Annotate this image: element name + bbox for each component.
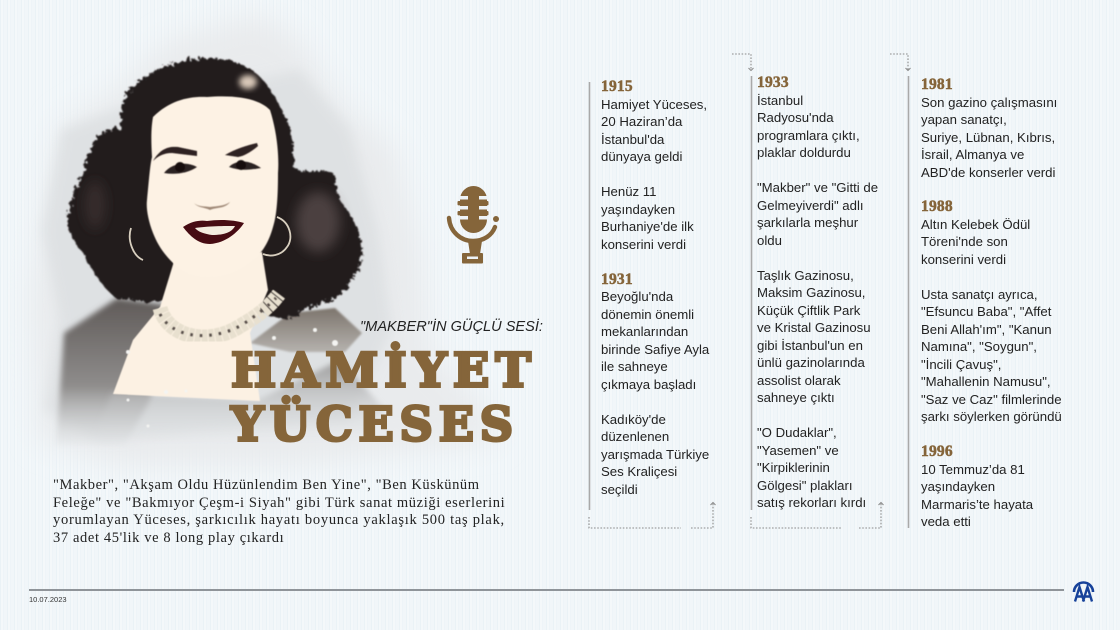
summary paragraph bbox=[53, 477, 505, 546]
year 1981: 1981 bbox=[921, 76, 953, 93]
timeline column 3: yaşındayken bbox=[921, 479, 995, 494]
timeline column 3: Altın Kelebek Ödül bbox=[921, 216, 1030, 232]
timeline column 1: İstanbul'da bbox=[601, 132, 664, 146]
eyes bbox=[164, 160, 261, 174]
timeline column 3: konserini verdi bbox=[921, 252, 1006, 266]
timeline column 1: dünyaya geldi bbox=[601, 149, 682, 164]
timeline column 2: Taşlık Gazinosu, bbox=[757, 268, 854, 282]
timeline column 2: "Kirpiklerinin bbox=[757, 460, 830, 475]
watercolor wash bbox=[30, 15, 500, 465]
timeline column 1: düzenlenen bbox=[601, 429, 669, 444]
hair bbox=[68, 58, 363, 320]
timeline column 1: Henüz 11 bbox=[601, 184, 656, 199]
timeline column 1: 20 Haziran’da bbox=[601, 114, 682, 129]
name line 1: HAMİYET bbox=[231, 342, 537, 398]
footer rule bbox=[29, 589, 1064, 590]
eyebrows bbox=[153, 143, 258, 161]
summary paragraph: "Makber", "Akşam Oldu Hüzünlendim Ben Yine", "Ben Küskünüm bbox=[53, 477, 480, 493]
timeline column 3: şarkı söylerken göründü bbox=[921, 409, 1062, 424]
timeline column 2: Gelmeyiverdi" adlı bbox=[757, 198, 864, 212]
date: 10.07.2023 bbox=[29, 595, 67, 604]
logo: AA bbox=[1072, 581, 1094, 602]
timeline column 3 bbox=[921, 76, 1062, 529]
timeline column 3: Töreni'nde son bbox=[921, 234, 1008, 249]
timeline column 3: "Mahallenin Namusu", bbox=[921, 374, 1051, 389]
timeline column 1: çıkmaya başladı bbox=[601, 376, 696, 392]
summary paragraph: 37 adet 45'lik ve 8 long play çıkardı bbox=[53, 530, 284, 546]
timeline column 3: yapan sanatçı, bbox=[921, 112, 1007, 127]
timeline column 1: Ses Kraliçesi bbox=[601, 464, 677, 479]
timeline column 3: Son gazino çalışmasını bbox=[921, 94, 1057, 110]
timeline column 1 bbox=[601, 78, 710, 496]
photo specks bbox=[126, 328, 338, 428]
earrings bbox=[130, 217, 290, 260]
timeline column 2: "O Dudaklar", bbox=[757, 425, 837, 440]
timeline column 1: Hamiyet Yüceses, bbox=[601, 96, 707, 112]
microphone icon bbox=[446, 186, 499, 264]
timeline column 2: sahneye çıktı bbox=[757, 390, 835, 405]
summary paragraph: Feleğe" ve "Bakmıyor Çeşm-i Siyah" gibi Türk sanat müziği eserlerini bbox=[53, 495, 505, 511]
timeline column 3: ABD'de konserler verdi bbox=[921, 164, 1055, 180]
hair highlights bbox=[85, 181, 340, 252]
timeline column 1: Beyoğlu'nda bbox=[601, 289, 673, 304]
jacket bbox=[56, 298, 385, 450]
year 1933: 1933 bbox=[757, 74, 789, 91]
timeline column 2: ve Kristal Gazinosu bbox=[757, 320, 871, 335]
timeline column 1: 1931 bbox=[601, 270, 633, 288]
timeline column 1: yaşındayken bbox=[601, 202, 675, 216]
timeline column 3: Namına", "Soygun", bbox=[921, 339, 1037, 354]
timeline column 1: Kadıköy'de bbox=[601, 412, 666, 426]
timeline column 3: "İncili Çavuş", bbox=[921, 356, 1001, 372]
timeline column 2: ünlü gazinolarında bbox=[757, 355, 865, 370]
year 1915: 1915 bbox=[601, 78, 633, 95]
lips bbox=[183, 220, 244, 244]
timeline column 1: yarışmada Türkiye bbox=[601, 446, 709, 462]
summary paragraph: yorumlayan Yüceses, şarkıcılık hayatı boyunca yaklaşık 500 taş plak, bbox=[53, 512, 505, 528]
timeline column 2: şarkılarla meşhur bbox=[757, 215, 858, 230]
nose bbox=[194, 202, 230, 210]
timeline column 2: gibi İstanbul'un en bbox=[757, 338, 863, 352]
timeline column 2: plaklar doldurdu bbox=[757, 145, 851, 160]
timeline column 3: 1988 bbox=[921, 198, 953, 215]
name line 2: YÜCESES bbox=[230, 396, 519, 452]
timeline column 1: ile sahneye bbox=[601, 359, 668, 374]
timeline column 3: "Efsuncu Baba", "Affet bbox=[921, 304, 1051, 319]
timeline column 2: assolist olarak bbox=[757, 372, 841, 388]
timeline column 3: Usta sanatçı ayrıca, bbox=[921, 286, 1038, 302]
timeline column 1: dönemin önemli bbox=[601, 306, 694, 322]
neck and chest bbox=[113, 252, 268, 401]
timeline column 2: Radyosu'nda bbox=[757, 110, 834, 125]
timeline column 2: oldu bbox=[757, 232, 782, 248]
timeline column 3: veda etti bbox=[921, 514, 971, 529]
timeline column 3: 10 Temmuz’da 81 bbox=[921, 462, 1025, 476]
timeline column 2 bbox=[757, 74, 878, 510]
timeline column 2: programlara çıktı, bbox=[757, 128, 860, 142]
hair shine bbox=[239, 75, 257, 89]
heading: title block bbox=[229, 317, 543, 452]
timeline column 2: Gölgesi" plakları bbox=[757, 478, 853, 492]
timeline column 2: "Yasemen" ve bbox=[757, 442, 839, 458]
timeline column 1: mekanlarından bbox=[601, 324, 688, 339]
timeline column 3: Marmaris’te hayata bbox=[921, 496, 1033, 512]
necklace bbox=[160, 294, 279, 337]
timeline column 2: İstanbul bbox=[757, 92, 803, 108]
face bbox=[147, 96, 278, 277]
timeline column 1: konserini verdi bbox=[601, 236, 686, 252]
timeline column 3: "Saz ve Caz" filmlerinde bbox=[921, 392, 1062, 406]
timeline column 1: Burhaniye'de ilk bbox=[601, 219, 694, 234]
timeline column 3: Suriye, Lübnan, Kıbrıs, bbox=[921, 130, 1055, 144]
subtitle: "MAKBER"İN GÜÇLÜ SESİ: bbox=[360, 317, 543, 335]
timeline column 2: satış rekorları kırdı bbox=[757, 495, 866, 510]
timeline column 2: "Makber" ve "Gitti de bbox=[757, 180, 878, 195]
timeline column 1: seçildi bbox=[601, 482, 638, 496]
timeline column 3: İsrail, Almanya ve bbox=[921, 147, 1024, 162]
timeline column 2: Maksim Gazinosu, bbox=[757, 285, 865, 300]
timeline column 3: Beni Allah'ım", "Kanun bbox=[921, 322, 1052, 336]
timeline column 3: 1996 bbox=[921, 443, 953, 460]
timeline column 2: Küçük Çiftlik Park bbox=[757, 302, 860, 318]
timeline column 1: birinde Safiye Ayla bbox=[601, 342, 709, 356]
